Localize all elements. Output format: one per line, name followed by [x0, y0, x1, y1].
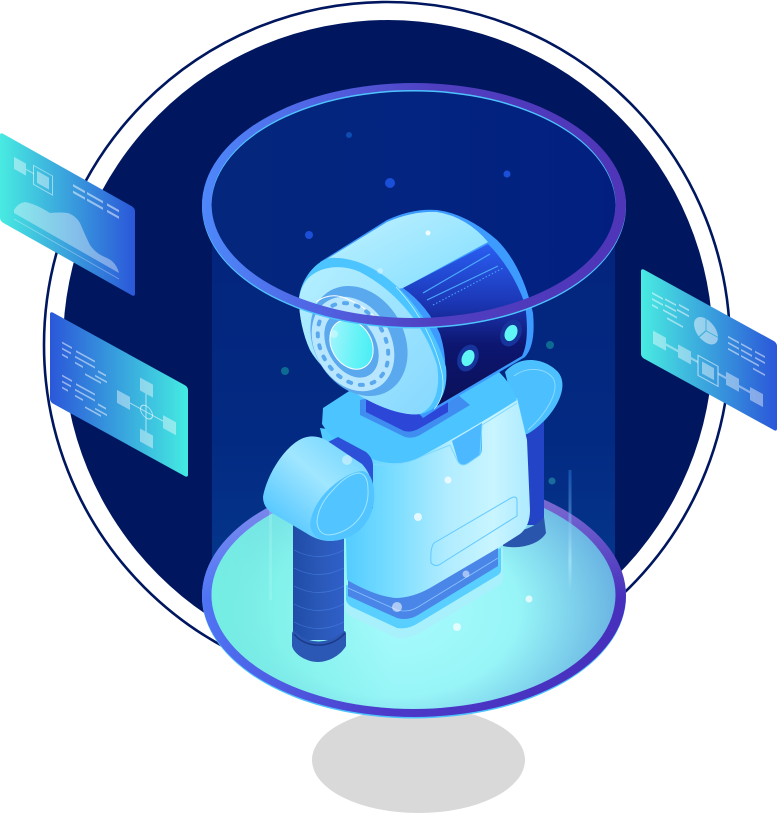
lens outer ring: [291, 268, 427, 414]
vest notch: [452, 423, 482, 465]
lens: [321, 312, 382, 377]
light beams: [269, 470, 572, 600]
flow nodes: [14, 154, 52, 195]
area chart: [14, 202, 119, 273]
panel lines: [423, 254, 498, 300]
dark background circle: [63, 20, 713, 670]
lens dashes: [304, 290, 402, 398]
head cylinder: [320, 210, 534, 418]
platform rim: [202, 474, 626, 717]
scanner ring: [202, 83, 626, 327]
light particles: [330, 230, 532, 631]
base band: [348, 545, 498, 619]
pie chart: [694, 312, 718, 349]
light column: [212, 205, 615, 596]
vest line: [355, 403, 517, 465]
text bars: [73, 184, 119, 219]
shoulder plate: [322, 352, 517, 463]
ground shadow: [312, 707, 525, 813]
card: pie and flow panel: [641, 268, 777, 432]
head face disc: [299, 267, 438, 414]
platform cyan edge: [202, 474, 626, 718]
right arm: [505, 360, 562, 436]
leg rings: [294, 550, 344, 628]
card: chart panel: [0, 132, 135, 297]
head side panel: [403, 244, 527, 406]
arm face: [310, 471, 374, 541]
band line: [348, 558, 498, 611]
base glow: [345, 548, 503, 638]
outer ring: [44, 2, 730, 688]
card: network panel: [50, 311, 188, 478]
background particles: [281, 132, 556, 484]
rim line: [396, 287, 443, 409]
right leg: [503, 395, 546, 547]
platform surface: [212, 481, 616, 709]
neck: [366, 385, 448, 432]
flow nodes: [653, 331, 763, 411]
eye right: [496, 316, 526, 350]
arm face outline: [317, 473, 368, 535]
lens plate: [295, 282, 411, 406]
network diagram: [117, 365, 176, 461]
left arm: [263, 436, 374, 541]
torso: [320, 398, 530, 598]
lens plate highlight: [316, 296, 380, 322]
neck shadow: [360, 380, 470, 438]
left leg: [292, 520, 346, 662]
text bars: [652, 289, 765, 376]
scanner ring interior: [210, 88, 618, 320]
left arm connector: [328, 437, 373, 512]
head top: [322, 212, 488, 300]
text bars: [62, 342, 107, 420]
eye left: [453, 341, 483, 375]
body: [320, 352, 530, 638]
label plate: [431, 497, 517, 566]
head face rim: [299, 258, 446, 414]
scanner ring edge: [202, 84, 626, 328]
lens blue surround: [313, 303, 390, 387]
robot head: [291, 210, 534, 418]
base glow inner: [346, 548, 501, 628]
